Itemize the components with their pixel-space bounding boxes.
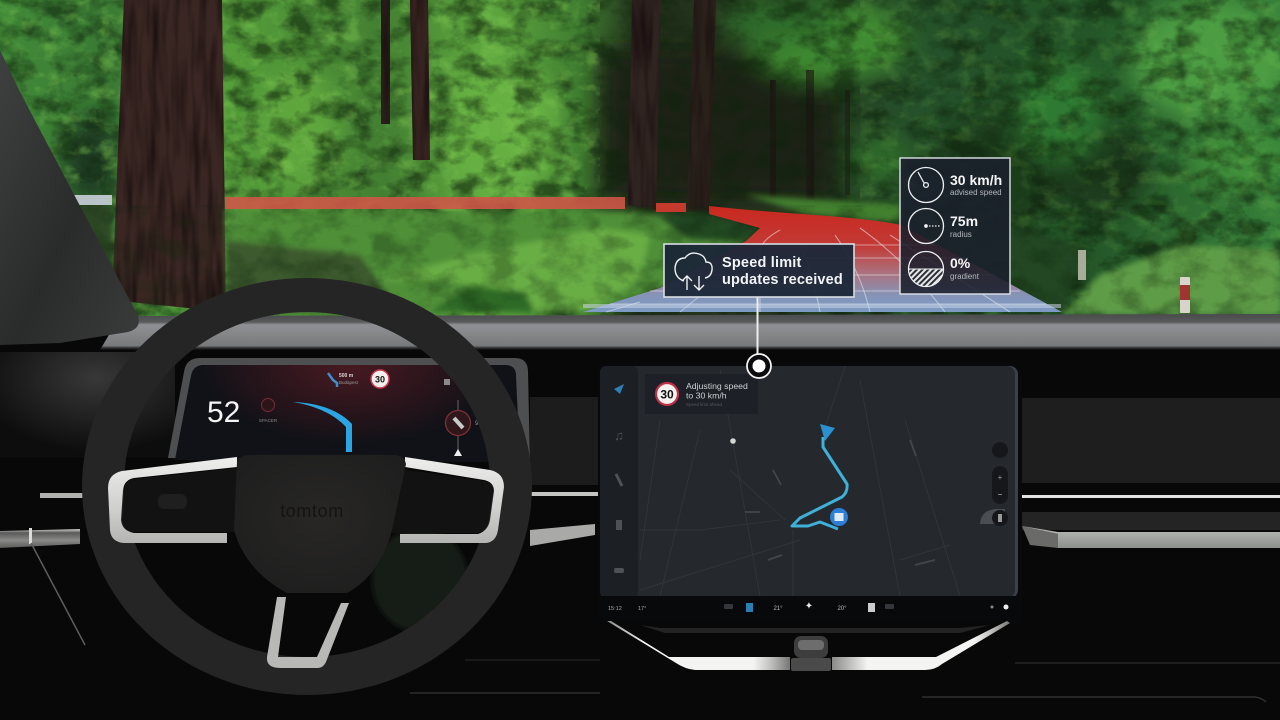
- next turn instruction: Budapest: [339, 380, 359, 385]
- trim strips: [40, 493, 90, 498]
- route grid: [606, 228, 1046, 312]
- speed limit sign on cluster: [371, 370, 389, 388]
- trunks: [112, 0, 850, 312]
- steering wheel: [82, 278, 532, 695]
- sidebar icons: [614, 384, 624, 573]
- icon: radius: [908, 208, 944, 244]
- A-pillar: [0, 50, 139, 345]
- callout: curve details: [900, 158, 1010, 294]
- callout: curve details: advised speed: [950, 188, 1002, 197]
- callout: speed limit updates: updates received: [722, 272, 843, 288]
- speed notification: [645, 374, 758, 414]
- callout: curve details: gradient: [950, 272, 980, 281]
- hub: [234, 455, 406, 593]
- centre display: [598, 364, 1022, 622]
- lower spoke: [267, 597, 349, 668]
- climate bar: 15:12: [608, 606, 622, 612]
- steering column shadow: [372, 528, 468, 632]
- speed notification: Adjusting speed: [686, 381, 748, 391]
- current speed: 52: [207, 396, 240, 429]
- instrument cluster: [168, 358, 530, 462]
- speed sign: 30: [660, 388, 674, 402]
- roadside post: [1078, 250, 1190, 313]
- cruise icon: SPACER: [259, 418, 278, 423]
- left switch pod: [122, 468, 237, 532]
- callout: speed limit updates: Speed limit: [722, 255, 802, 271]
- speed notification: to 30 km/h: [686, 390, 727, 400]
- wheel rim: [82, 278, 532, 695]
- next turn instruction: [328, 373, 359, 387]
- POI: [730, 438, 736, 444]
- speed limit sign on cluster: 30: [375, 374, 385, 384]
- cruise icon: [259, 398, 278, 423]
- callout: curve details: 0%: [950, 255, 971, 271]
- forest scene: [0, 0, 1280, 320]
- destination pin: [830, 508, 848, 526]
- callout: curve details: 30 km/h: [950, 172, 1002, 188]
- display mount: [607, 621, 1010, 671]
- icon: gradient: [908, 252, 944, 286]
- projected red route: [73, 195, 1062, 312]
- callout: curve details: radius: [950, 230, 972, 239]
- next turn instruction: 500 m: [339, 373, 354, 379]
- map roads: [640, 366, 960, 596]
- blue route on cluster: [293, 402, 352, 452]
- icon: advised speed dial: [908, 168, 944, 202]
- spoke trim: [108, 457, 504, 543]
- icon: cloud with arrows: [675, 253, 712, 290]
- dashboard: [0, 314, 1280, 720]
- callout: curve details: 75m: [950, 213, 978, 229]
- climate bar: 17°: [638, 606, 646, 612]
- right switch pod: [392, 468, 493, 533]
- position arrow: [820, 424, 835, 441]
- climate bar: 21°: [773, 606, 783, 612]
- climate bar: ✦: [805, 601, 813, 612]
- assist gauge: 90: [475, 421, 482, 427]
- route line: [792, 437, 847, 529]
- callout: speed limit updates: [664, 244, 854, 297]
- connector with marker: [747, 297, 771, 378]
- climate bar: [600, 596, 1018, 622]
- brand mark: tomtom: [280, 501, 344, 521]
- sidebar icons: ♫: [614, 428, 624, 443]
- climate bar: 20°: [837, 606, 847, 612]
- map controls: [980, 442, 1008, 526]
- map controls: +: [998, 473, 1003, 482]
- map controls: −: [998, 490, 1003, 499]
- grass: [0, 190, 1280, 315]
- assist gauge: [444, 379, 482, 456]
- speed notification: Speed limit ahead: [686, 402, 723, 407]
